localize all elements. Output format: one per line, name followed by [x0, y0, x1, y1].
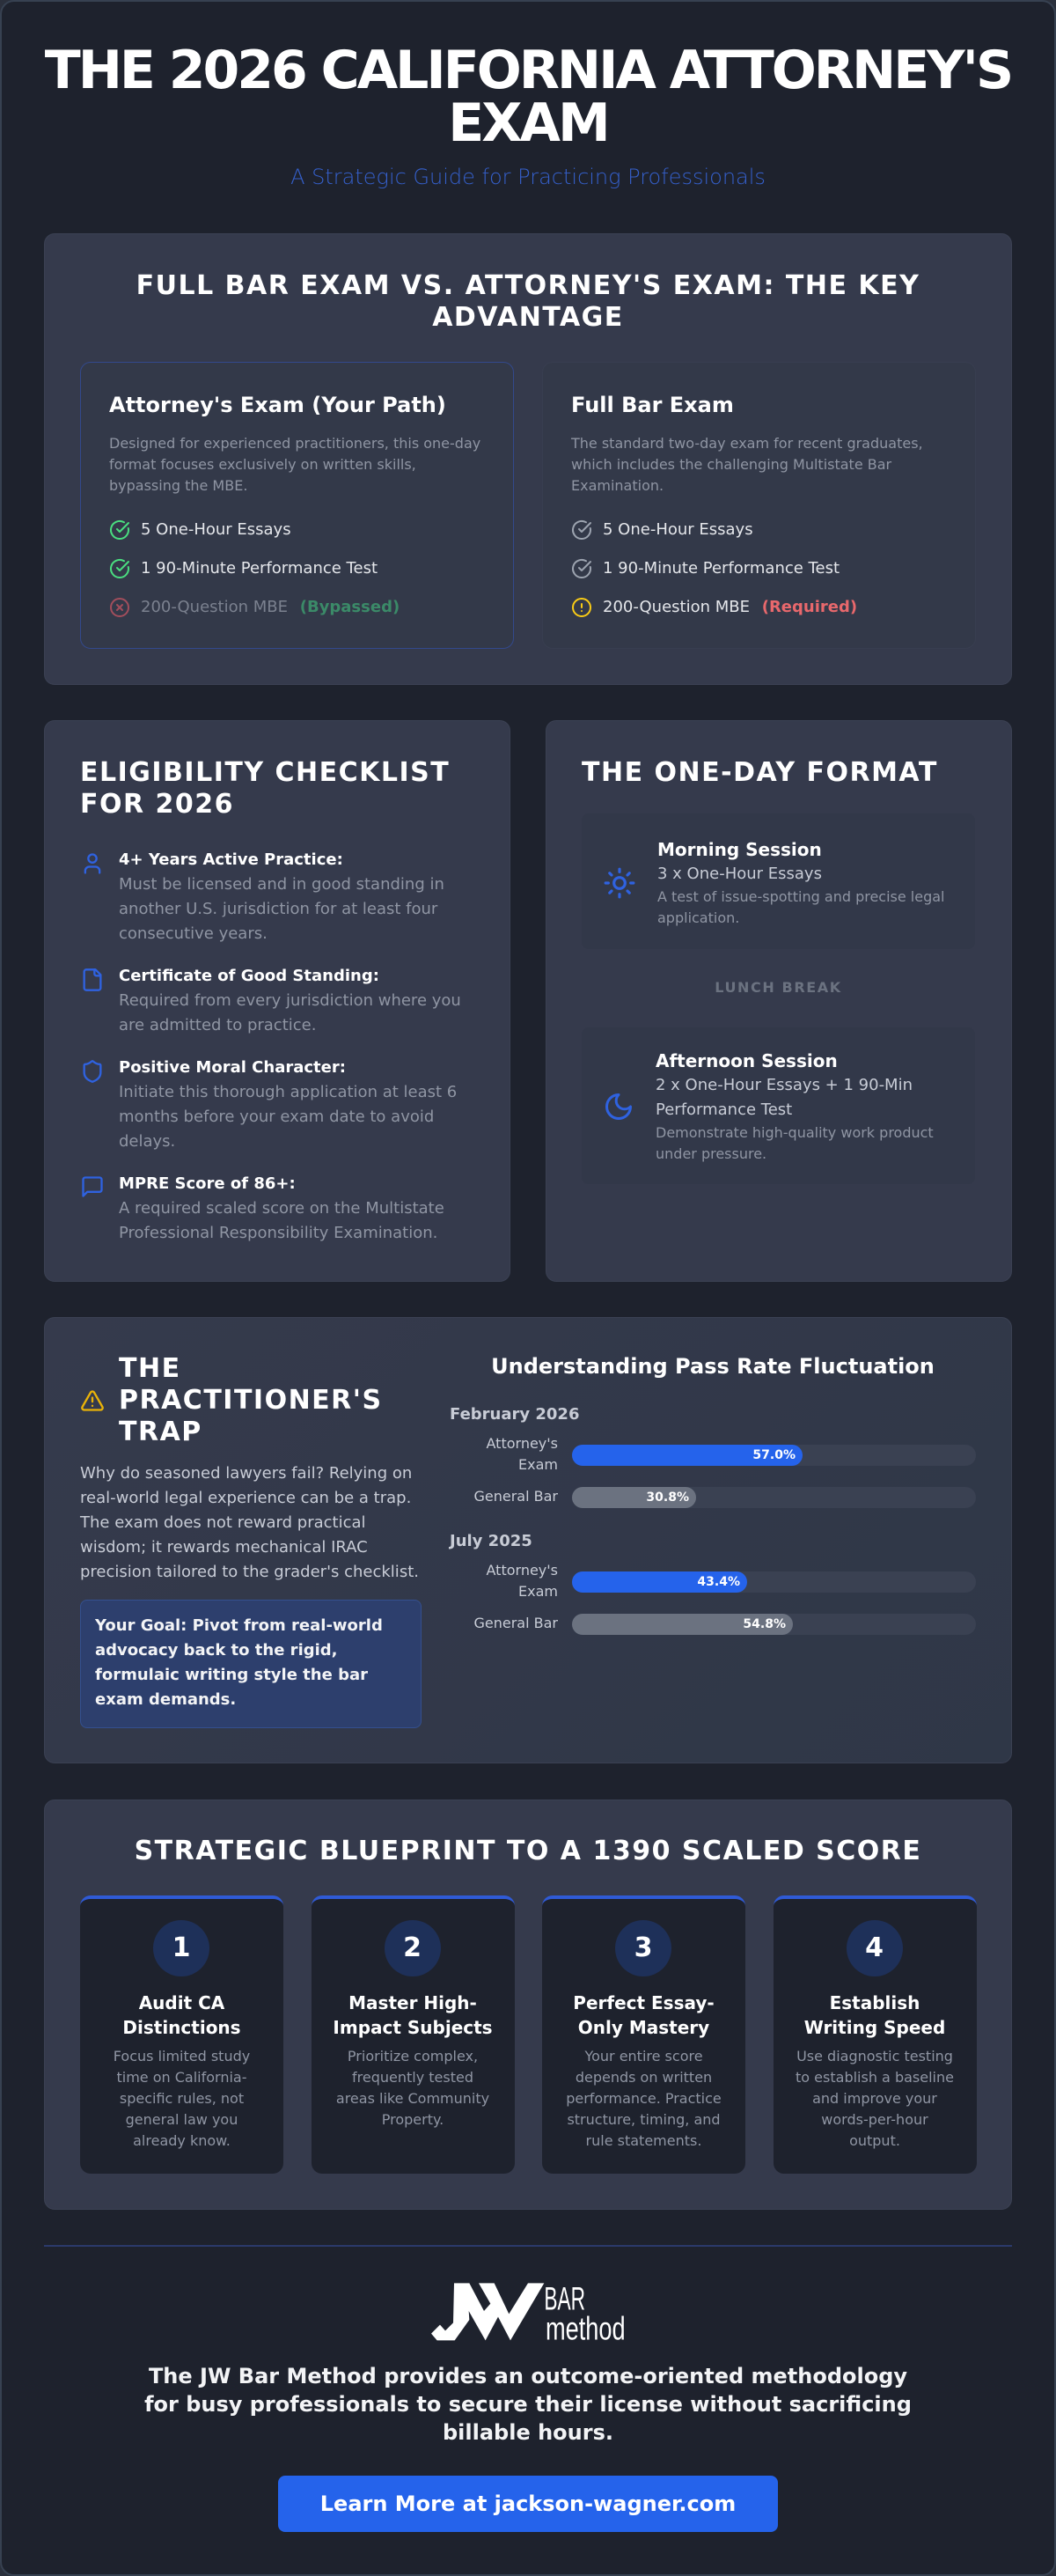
step description [336, 2048, 489, 2128]
checklist item: MPRE [119, 1174, 444, 1242]
step description: Your entire score [584, 2048, 703, 2064]
closing statement: The JW Bar Method provides an outcome-oriented methodology [149, 2364, 907, 2388]
morning session text: Morning Session [657, 839, 822, 860]
bar label: Attorney's [487, 1435, 558, 1452]
checklist item: MPRE: MPRE Score of 86+: [119, 1174, 296, 1193]
checklist item: MPRE: Professional Responsibility Examination. [119, 1224, 437, 1242]
morning session text [657, 839, 945, 926]
step title [333, 1992, 493, 2038]
checklist item: practice: another U.S. jurisdiction for at least four [119, 900, 437, 918]
icon: moon [605, 1093, 632, 1120]
heading: format: THE ONE-DAY FORMAT [582, 757, 938, 788]
checklist item: moral character: Positive Moral Character: [119, 1058, 346, 1077]
button: learn more [278, 2476, 778, 2532]
morning session text: A test of issue-spotting and precise legal [657, 888, 945, 905]
morning session text: application. [657, 909, 739, 926]
afternoon session text [656, 1050, 934, 1162]
list item: 1 90-Minute Performance Test [603, 559, 840, 578]
lunch break: LUNCH BREAK [715, 979, 842, 996]
step description: Prioritize complex, [348, 2048, 478, 2064]
callout text: Your Goal: Pivot from real-world [95, 1616, 383, 1635]
step number: 2 [403, 1932, 422, 1963]
bar label: General Bar [473, 1488, 558, 1505]
trap paragraph: precision tailored to the grader's checklist. [80, 1563, 419, 1581]
heading: trap: THE [119, 1353, 181, 1384]
card description: format focuses exclusively on written skills, [109, 456, 416, 473]
step description: general law you [126, 2111, 238, 2128]
step number [153, 1920, 209, 1976]
bar: general Feb [572, 1487, 976, 1508]
step 1 [80, 1895, 283, 2174]
checklist item: moral character: months before your exam date to avoid [119, 1108, 434, 1126]
callout text: exam demands. [95, 1690, 236, 1709]
group label: February 2026: February 2026 [450, 1405, 579, 1424]
checklist item: practice: 4+ Years Active Practice: [119, 850, 343, 869]
title: EXAM [448, 92, 608, 154]
panel: practitioner's trap [44, 1317, 1012, 1763]
step title: Only Mastery [578, 2017, 709, 2038]
icon: check [109, 519, 129, 540]
card description: Designed for experienced practitioners, this one-day [109, 435, 480, 452]
checklist item: certificate [119, 967, 461, 1034]
trap paragraph: real-world legal experience can be a trap. [80, 1489, 411, 1507]
icon: shield [83, 1060, 102, 1083]
logo: JW Bar Method [431, 2279, 626, 2346]
session: morning [582, 813, 975, 949]
logo: JW Bar Method: BAR [544, 2279, 585, 2316]
heading: eligibility: FOR 2026 [80, 789, 234, 820]
heading: comparison [136, 270, 920, 333]
panel: eligibility checklist [44, 720, 510, 1282]
bar: general July [572, 1614, 976, 1635]
step title [122, 1992, 241, 2038]
card: full bar exam [542, 362, 976, 649]
closing statement: for busy professionals to secure their license without sacrificing [144, 2392, 912, 2417]
step description: specific rules, not [120, 2090, 244, 2107]
step title: Master High- [348, 1992, 477, 2013]
callout text: formulaic writing style the bar [95, 1666, 368, 1684]
step title: Impact Subjects [333, 2017, 493, 2038]
heading: eligibility [80, 757, 450, 820]
step title: Audit CA [139, 1992, 224, 2013]
title: THE 2026 CALIFORNIA ATTORNEY'S [45, 40, 1011, 101]
trap paragraph [79, 1464, 419, 1581]
icon: message square [82, 1176, 103, 1197]
session: afternoon [582, 1027, 975, 1184]
step 4 [773, 1895, 977, 2174]
step description: depends on written [576, 2069, 712, 2086]
step number: 3 [634, 1932, 652, 1963]
panel: one-day format [546, 720, 1012, 1282]
step description: Property. [382, 2111, 444, 2128]
list item: 1 90-Minute Performance Test [141, 559, 378, 578]
bar: general July: 54.8% [743, 1617, 786, 1631]
checklist item: certificate: Certificate of Good Standing: [119, 967, 379, 985]
card description: The standard two-day exam for recent graduates, [571, 435, 923, 452]
icon: check [572, 519, 591, 540]
checklist item: certificate: Required from every jurisdiction where you [119, 991, 461, 1010]
checklist item: practice: Must be licensed and in good standing in [119, 875, 444, 894]
step description: Focus limited study [114, 2048, 250, 2064]
bar label [486, 1435, 558, 1473]
icon: x circle [110, 598, 129, 617]
morning session text: 3 x One-Hour Essays [657, 865, 822, 883]
checklist item: practice [119, 850, 444, 943]
step title [573, 1992, 715, 2038]
afternoon session text: 2 x One-Hour Essays + 1 90-Min [656, 1076, 913, 1094]
step description: frequently tested [352, 2069, 473, 2086]
checklist item: moral character: Initiate this thorough application at least 6 [119, 1083, 457, 1101]
step description: and improve your [812, 2090, 937, 2107]
list item: bypassed: 200-Question MBE (Bypassed) [141, 598, 400, 616]
step number: 1 [172, 1932, 190, 1963]
checklist item: certificate: are admitted to practice. [119, 1016, 316, 1034]
step description: to establish a baseline [796, 2069, 954, 2086]
card title: Full Bar Exam [571, 393, 734, 417]
step title: Distinctions [122, 2017, 241, 2038]
callout text: advocacy back to the rigid, [95, 1641, 338, 1660]
bar: general Feb: 30.8% [646, 1490, 689, 1505]
card: attorney's exam [80, 362, 514, 649]
heading: comparison: FULL BAR EXAM VS. ATTORNEY'S EXAM: THE KEY [136, 270, 920, 301]
step number [847, 1920, 903, 1976]
panel: exam comparison [44, 233, 1012, 685]
step description: output. [849, 2132, 900, 2149]
trap paragraph: Why do seasoned lawyers fail? Relying on [80, 1464, 412, 1483]
step description: Use diagnostic testing [796, 2048, 953, 2064]
heading: trap [119, 1353, 383, 1447]
list item: 5 One-Hour Essays [141, 520, 291, 539]
step title: Writing Speed [804, 2017, 945, 2038]
step description [566, 2048, 722, 2149]
step 3 [542, 1895, 745, 2174]
card description [109, 435, 480, 494]
bar label: General Bar [473, 1615, 558, 1631]
closing statement [0, 2362, 1056, 2447]
card title: Attorney's Exam (Your Path) [109, 393, 446, 417]
afternoon session text: Demonstrate high-quality work product [656, 1124, 934, 1141]
card description: Examination. [571, 477, 664, 494]
step 2 [312, 1895, 514, 2174]
checklist item: practice: consecutive years. [119, 924, 268, 943]
bar label: Attorney's [487, 1562, 558, 1579]
step number [615, 1920, 671, 1976]
afternoon session text: under pressure. [656, 1145, 766, 1162]
step description [114, 2048, 250, 2149]
bar: attorney's Feb: 57.0% [752, 1448, 796, 1462]
icon: warning triangle [81, 1390, 104, 1411]
bar label [486, 1562, 558, 1600]
card description [570, 435, 923, 494]
bar: attorney's July: 43.4% [697, 1575, 740, 1589]
callout text [95, 1616, 383, 1709]
heading: eligibility: ELIGIBILITY CHECKLIST [80, 757, 450, 788]
step description: already know. [133, 2132, 231, 2149]
step title: Perfect Essay- [573, 1992, 715, 2013]
list item: required: 200-Question MBE (Required) [603, 598, 857, 616]
step description [796, 2048, 954, 2149]
step description: words-per-hour [821, 2111, 928, 2128]
icon: check [109, 558, 129, 578]
step number: 4 [865, 1932, 884, 1963]
closing statement: billable hours. [443, 2420, 613, 2445]
icon: sun [604, 868, 635, 898]
heading: comparison: ADVANTAGE [432, 302, 624, 333]
callout: your goal [80, 1600, 422, 1728]
list item: 5 One-Hour Essays [603, 520, 753, 539]
step description: performance. Practice [566, 2090, 722, 2107]
card description: bypassing the MBE. [109, 477, 247, 494]
step number [384, 1920, 440, 1976]
step description: time on California- [116, 2069, 246, 2086]
step description: rule statements. [586, 2132, 701, 2149]
checklist item: moral character [119, 1058, 457, 1151]
title [45, 40, 1011, 154]
heading: trap: PRACTITIONER'S [119, 1385, 383, 1416]
button: learn more: Learn More at jackson-wagner.com [320, 2491, 736, 2516]
trap paragraph: The exam does not reward practical [80, 1513, 366, 1532]
subtitle: A Strategic Guide for Practicing Professionals [290, 165, 766, 189]
bar: attorney's Feb [572, 1445, 976, 1466]
step description: structure, timing, and [567, 2111, 721, 2128]
afternoon session text: Afternoon Session [656, 1050, 838, 1071]
icon: alert circle [572, 598, 591, 617]
panel: strategic blueprint [44, 1800, 1012, 2210]
step title: Establish [830, 1992, 920, 2013]
chart heading: Understanding Pass Rate Fluctuation [491, 1354, 935, 1379]
checklist item: moral character: delays. [119, 1132, 175, 1151]
bar label: Exam [518, 1583, 558, 1600]
checklist item: MPRE: A required scaled score on the Multistate [119, 1199, 444, 1218]
heading: blueprint: STRATEGIC BLUEPRINT TO A 1390 SCALED SCORE [135, 1836, 921, 1866]
step title [804, 1992, 945, 2038]
trap paragraph: wisdom; it rewards mechanical IRAC [80, 1538, 368, 1557]
icon: user [84, 853, 100, 874]
bar label: Exam [518, 1456, 558, 1473]
group label: July 2025: July 2025 [450, 1532, 532, 1550]
bar: attorney's July [572, 1571, 976, 1593]
step description: areas like Community [336, 2090, 489, 2107]
icon: check [572, 558, 591, 578]
heading: trap: TRAP [119, 1417, 202, 1447]
afternoon session text: Performance Test [656, 1100, 792, 1119]
card description: which includes the challenging Multistate Bar [571, 456, 891, 473]
icon: file [83, 968, 102, 991]
